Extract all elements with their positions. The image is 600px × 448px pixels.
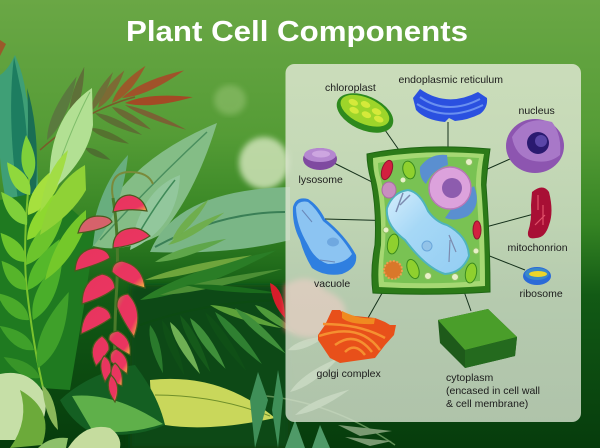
icon: chloroplast [331, 85, 399, 141]
icon: ribosome [523, 267, 551, 285]
label: chloroplast: chloroplast [325, 82, 376, 94]
title: Plant Cell Components [126, 16, 468, 48]
label: endoplasmic reticulum: endoplasmic reticulum [398, 74, 503, 86]
icon: cytoplasm block [438, 309, 517, 368]
nucleus in cell [429, 167, 471, 209]
label: vacuole: vacuole [314, 278, 350, 290]
label: cytoplasm description: & cell membrane) [446, 398, 528, 410]
label: mitochonrion: mitochonrion [508, 242, 568, 254]
label: nucleus: nucleus [518, 105, 555, 117]
foliage: fern under panel, bottom [250, 333, 395, 448]
foliage: backing behind palm [0, 190, 95, 390]
foliage: bright green palm frond, left [0, 88, 93, 392]
connector lines [325, 122, 534, 318]
panel: translucent cell diagram card [286, 64, 581, 422]
foliage: brown fern [40, 63, 193, 163]
icon: vacuole [293, 198, 356, 275]
plant cell diagram [367, 147, 490, 294]
icon: nucleus [506, 119, 564, 173]
foliage: dark palm frond, centre [138, 244, 298, 377]
foliage: lower leaves [0, 365, 275, 448]
icon: mitochondrion [528, 188, 552, 238]
rough ER around nucleus [420, 155, 448, 184]
icon: golgi complex [318, 310, 396, 363]
icon: endoplasmic reticulum [413, 89, 487, 122]
label: golgi complex: golgi complex [316, 368, 381, 380]
foliage: pale jungle leaves [90, 123, 290, 266]
pink flower behind panel [285, 279, 346, 338]
label: ribosome: ribosome [520, 288, 563, 300]
organelles in cell [379, 159, 395, 181]
foliage: teal tall leaves [0, 55, 38, 225]
label: lysosome: lysosome [298, 174, 343, 186]
vacuole in cell [387, 190, 469, 274]
icon: lysosome [303, 148, 337, 170]
heliconia flower [75, 172, 153, 402]
label: cytoplasm description: cytoplasm [446, 372, 494, 384]
label: cytoplasm description: (encased in cell wall [446, 385, 540, 397]
